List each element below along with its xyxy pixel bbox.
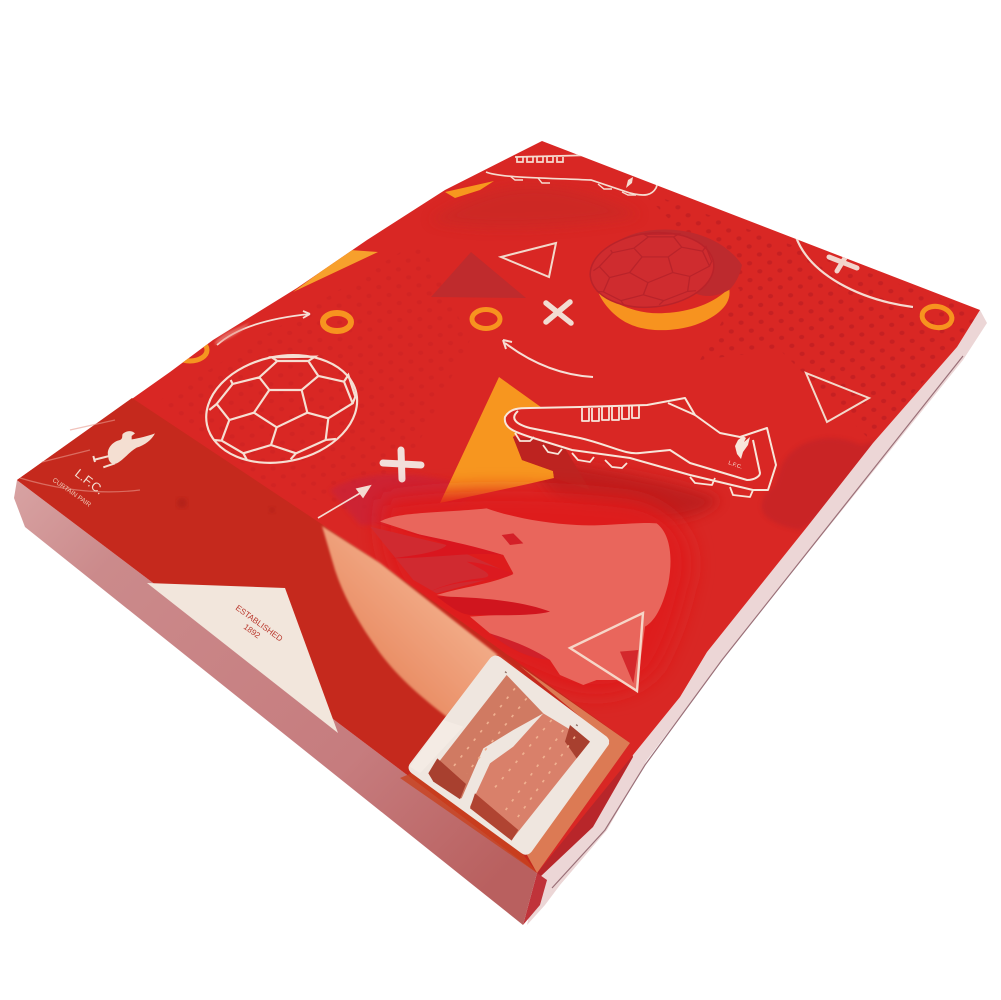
- outline triangle upper: [501, 243, 556, 277]
- cross upper: [546, 302, 571, 323]
- dark football: [590, 234, 713, 308]
- top face of package: [0, 130, 1001, 890]
- outline triangle lower: [570, 613, 643, 691]
- cross lower: [383, 450, 421, 479]
- orange wedge top left: [293, 250, 378, 292]
- white triangle panel: [147, 583, 338, 733]
- curtain pleats: [453, 688, 575, 823]
- plastic bottom tip: [523, 873, 547, 925]
- arc arrow centre: [503, 340, 593, 377]
- icon: liver bird: [93, 431, 155, 467]
- football boot: [505, 398, 776, 497]
- dark blobs: [330, 438, 880, 530]
- halftone dots: [640, 190, 985, 440]
- arrow top left: [217, 311, 310, 345]
- curtain right panel: [470, 713, 590, 840]
- dark studs shadow on triangle: [513, 437, 577, 478]
- established text: ESTABLISHED: [234, 603, 284, 643]
- plastic crease: [215, 322, 250, 345]
- football: [205, 354, 358, 464]
- boot logo: L.F.C.: [727, 460, 743, 471]
- established text: 1892: [242, 622, 262, 641]
- L.F.C. wordmark: L.F.C.: [72, 466, 107, 497]
- plastic red strip: [537, 743, 633, 877]
- sleeve marks: [177, 498, 187, 508]
- sleeve plastic highlight: [20, 420, 140, 492]
- orange ring partial left: [182, 344, 210, 364]
- large arc right: [796, 237, 913, 307]
- sleeve lower-right tone: [520, 666, 630, 873]
- dark triangle: [431, 252, 526, 298]
- curtain label: [409, 656, 609, 855]
- dark blob behind upper ball: [620, 229, 742, 296]
- curtain hems: [428, 758, 466, 799]
- orange crescent: [597, 288, 730, 330]
- plastic glare: [370, 491, 691, 694]
- arrow lower: [318, 486, 370, 518]
- package side face: [14, 480, 537, 925]
- outline triangle right: [806, 373, 869, 422]
- cross right: [829, 253, 857, 271]
- plastic wrapper right edge: [523, 310, 987, 925]
- upper boot: [486, 155, 657, 195]
- orange ring centre: [472, 310, 500, 328]
- boot logo: [727, 436, 750, 471]
- curtain left panel: [430, 675, 543, 798]
- package: [0, 130, 1001, 925]
- orange ring right: [920, 304, 954, 330]
- curtain rod: [505, 672, 597, 740]
- curtain reflection: [410, 720, 463, 773]
- orange ring left: [323, 313, 351, 331]
- sleeve band: [17, 398, 630, 873]
- curtain pair text: CURTAIN PAIR: [51, 477, 92, 509]
- orange wedge top: [445, 181, 494, 198]
- orange triangle large: [440, 377, 554, 503]
